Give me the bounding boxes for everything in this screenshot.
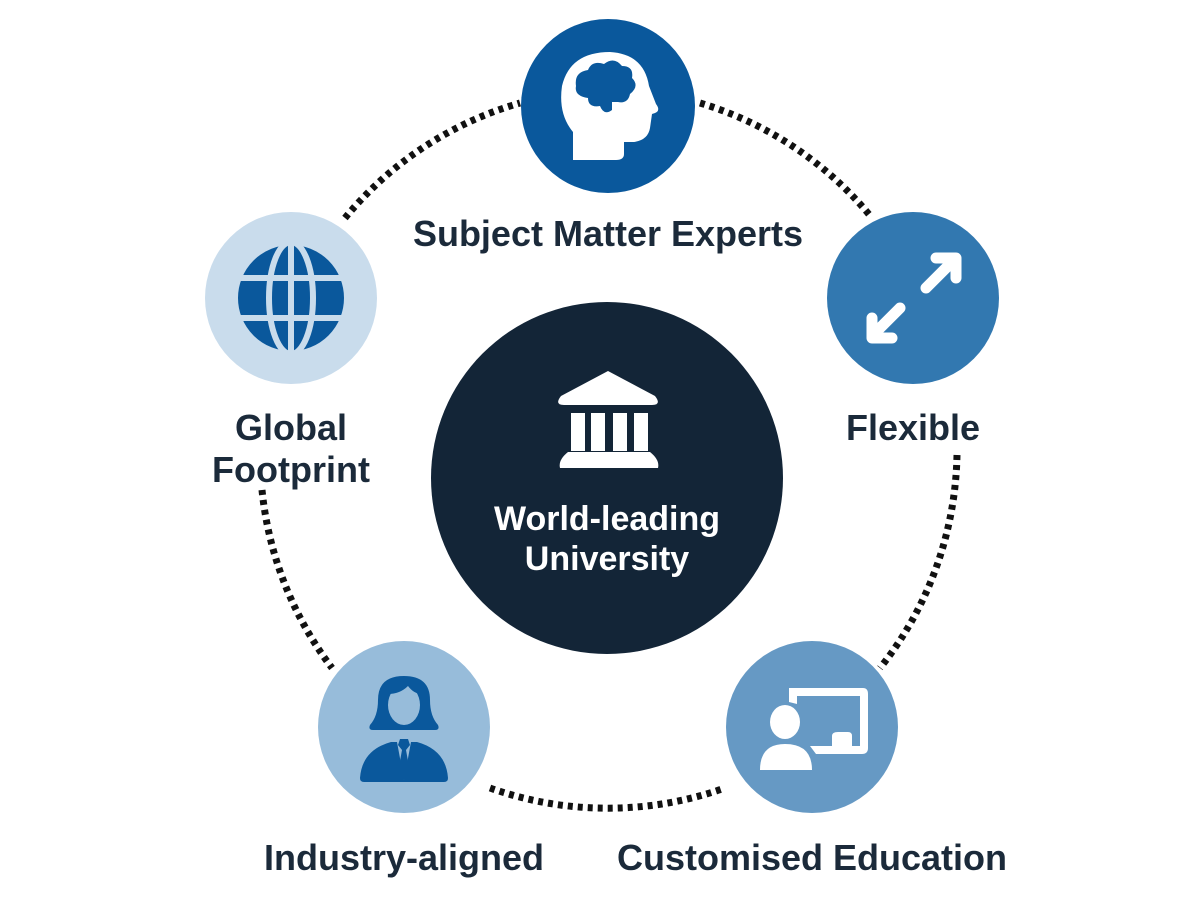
icon: businesswoman [360,676,448,782]
node: Subject Matter Experts [413,19,803,254]
label: Global [235,407,347,448]
label: Customised Education [617,837,1007,878]
node: Flexible [827,212,999,448]
node: Customised Education [617,641,1007,878]
icon: teacher at board [760,688,868,770]
dotted connector arcs [262,103,957,808]
node: Global Footprint [205,212,377,490]
center circle: World-leading University: University [525,540,689,578]
icon: head with brain [561,52,658,160]
center label: World-leading [494,500,720,538]
center circle: World-leading University [431,302,783,654]
node: Global Footprint: Footprint [212,449,370,490]
icon: university building [558,371,658,468]
node: Industry-aligned [264,641,544,878]
icon: expand arrows [872,258,956,338]
label: Flexible [846,407,980,448]
icon: globe [232,240,350,356]
label: Subject Matter Experts [413,213,803,254]
label: Industry-aligned [264,837,544,878]
